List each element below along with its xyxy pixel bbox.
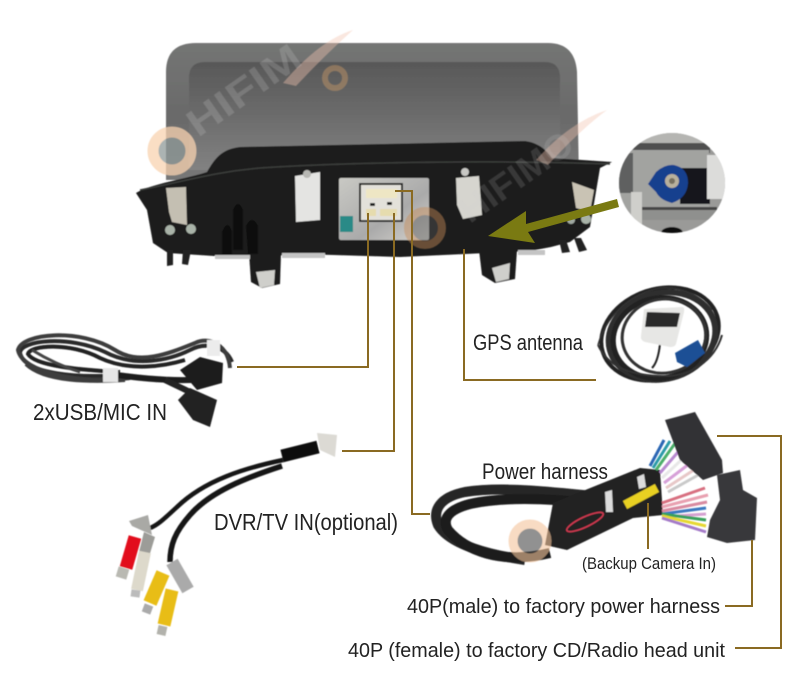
gray display housing — [166, 43, 579, 190]
panel: head unit rear — [136, 43, 612, 288]
coloured wire bundles — [650, 440, 708, 532]
red wire loop — [565, 509, 605, 535]
silver plate and connector block — [339, 178, 429, 240]
label: GPS antenna: GPS antenna — [473, 330, 584, 355]
cable: power harness — [436, 412, 757, 560]
watermark: HIFIMOX on head unit — [153, 30, 607, 245]
label: Power harness: Power harness — [482, 459, 608, 484]
mounting tabs and pegs — [167, 204, 587, 288]
harness sleeve — [545, 468, 663, 550]
leader lines — [237, 191, 781, 648]
label: Backup camera: (Backup Camera In) — [582, 554, 716, 573]
yellow RCA plug — [625, 488, 657, 505]
recessed screen back — [189, 62, 560, 170]
icon: inset GPS port close-up — [619, 133, 726, 239]
harness watermark ring — [513, 524, 547, 558]
cable: DVR/TV IN — [121, 433, 337, 635]
label: USB/MIC: 2xUSB/MIC IN — [33, 399, 167, 425]
cable: 2xUSB/MIC IN — [18, 335, 232, 427]
black rear frame — [136, 141, 612, 258]
watermark: HIFIMOX on head unit: HIFIMO — [451, 122, 581, 231]
label: 40P female: 40P (female) to factory CD/Radio head unit — [348, 640, 725, 662]
arrow: olive pointer to GPS port — [488, 199, 619, 243]
frame top rim highlight — [140, 162, 610, 190]
icon: GPS antenna — [589, 273, 731, 395]
watermark: HIFIMOX on head unit: HIFIM — [179, 36, 310, 145]
label: DVR/TV: DVR/TV IN(optional) — [214, 509, 398, 535]
sleeve labels — [605, 474, 646, 512]
label: 40P male: 40P(male) to factory power harness — [407, 596, 720, 618]
white metal brackets and screws — [165, 168, 594, 235]
factory plugs — [665, 412, 723, 480]
